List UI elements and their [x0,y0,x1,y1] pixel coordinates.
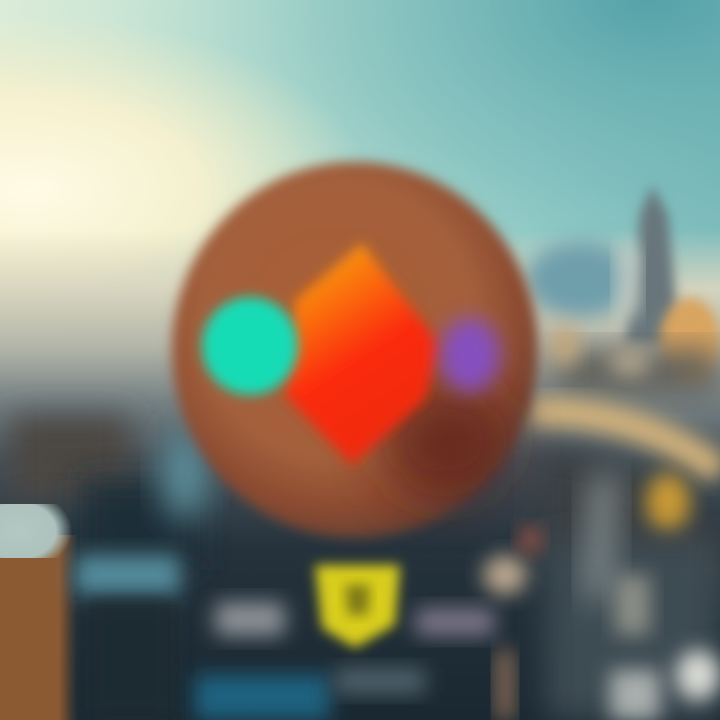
icon: red orange diamond [285,243,440,465]
large brown sphere [172,162,538,538]
city ground [0,230,720,720]
lower right buildings [483,470,720,720]
right bridge arc [530,412,720,600]
icon: purple circle [440,318,500,392]
right distant hills and tower [525,185,720,395]
lower left barrel and roof [0,504,180,720]
icon: teal circle [202,297,298,395]
lower centre sign [195,565,495,720]
